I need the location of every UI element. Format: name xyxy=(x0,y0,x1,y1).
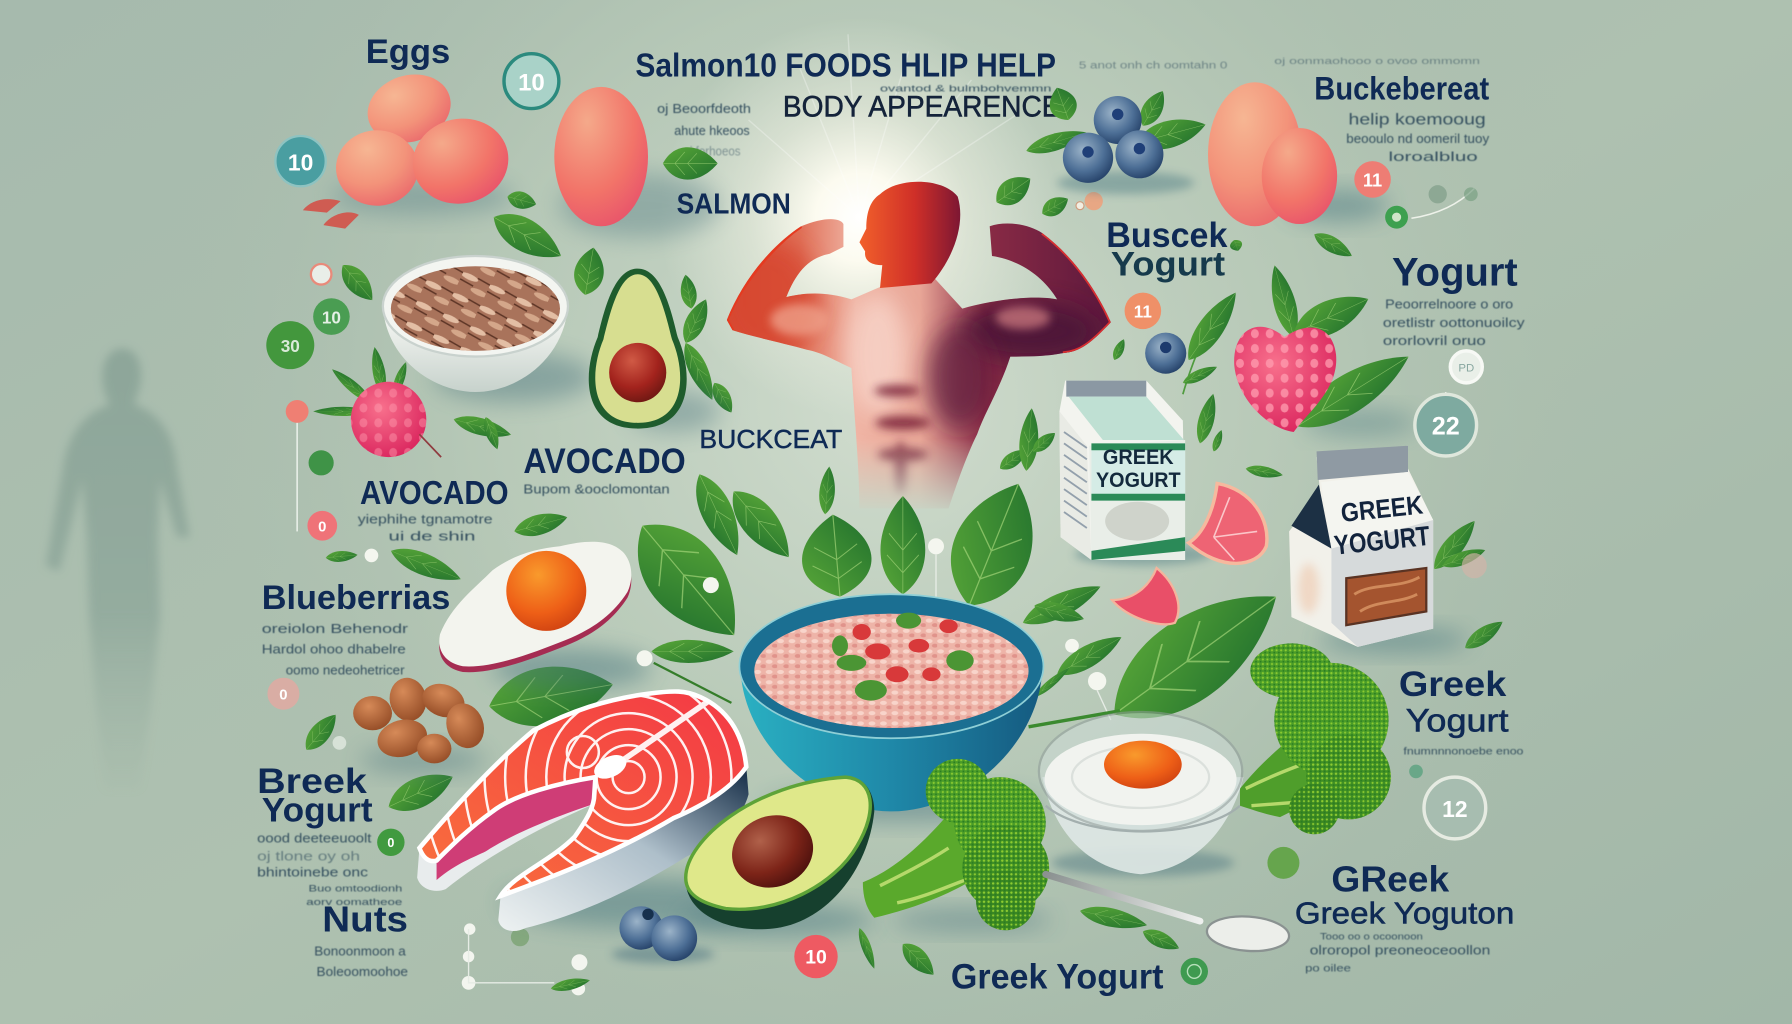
icon: left broccoli xyxy=(863,759,1051,931)
top right faint text: oj oonmaohooo o ovoo ommomn xyxy=(1274,56,1480,66)
small badges: left bottom: 0 xyxy=(279,687,288,703)
label: buscek yogurt: Yogurt xyxy=(1111,245,1225,283)
icon: bowl of buckwheat xyxy=(383,256,594,402)
leaves: upper left cluster xyxy=(335,147,738,416)
label: breek yogurt: Yogurt xyxy=(262,792,373,830)
label: yogurt right: Peoorrelnoore o oro xyxy=(1385,298,1513,312)
icon: yogurt carton large: YOGURT xyxy=(1333,520,1431,561)
small fruit and leaves near man xyxy=(989,169,1356,474)
label: breek yogurt: oood deeteeuoolt xyxy=(257,831,372,845)
text block: top left salmon note xyxy=(657,102,751,158)
label: avocado lower: yiephihe tgnamotre xyxy=(358,512,493,526)
title: Salmon10 FOODS HLIP HELP xyxy=(635,48,1056,85)
icon: right broccoli xyxy=(1240,643,1391,834)
badges: left column: 10 xyxy=(322,307,341,327)
badges: right column mid: 22 xyxy=(1432,412,1460,440)
badge: 12: 12 xyxy=(1442,796,1468,822)
icon: large egg xyxy=(554,87,720,238)
icon: spoon xyxy=(855,874,1290,982)
label: greek yogurt right: Greek xyxy=(1399,664,1507,704)
icon: trio of eggs xyxy=(303,64,516,229)
label: nuts: aorv oomatheoe xyxy=(306,897,402,907)
label: yogurt right xyxy=(1383,251,1525,348)
badge: 10 top xyxy=(504,54,559,109)
label: greek yogurt right: Yogurt xyxy=(1406,702,1509,738)
badges: right column top: 11 xyxy=(1363,169,1382,190)
icon: top blueberries xyxy=(1024,83,1209,194)
icon: heart raspberry xyxy=(1234,263,1419,443)
icon: salmon steak xyxy=(416,689,749,938)
small badges: left bottom: 0 xyxy=(387,836,394,850)
label: avocado lower xyxy=(358,475,509,544)
label: buscek yogurt: 11 xyxy=(1134,302,1152,322)
central glow and rays xyxy=(659,17,1059,417)
label: buckebereat: loroalbluo xyxy=(1389,150,1478,164)
label: nuts: Boleoomoohoe xyxy=(317,965,408,979)
label: buscek yogurt: Buscek xyxy=(1106,215,1228,255)
badges: bottom: 10 xyxy=(805,946,827,968)
spinach leaves behind bowl xyxy=(365,466,1127,720)
text block: top left salmon note: oj Beoorfdeoth xyxy=(657,102,751,116)
label: nuts: Buo omtoodionh xyxy=(309,883,402,893)
label: greek yogurt bottom: Greek Yogurt xyxy=(951,957,1164,997)
label: greek yoguton: po oilee xyxy=(1305,963,1351,974)
label: avocado upper: AVOCADO xyxy=(523,441,686,481)
leaves: mid left xyxy=(299,411,618,820)
badges: left column xyxy=(266,264,350,541)
label: buckceat: BUCKCEAT xyxy=(699,424,842,454)
label: yogurt right: Yogurt xyxy=(1392,251,1518,295)
badge: 10 top: 10 xyxy=(518,69,545,96)
label: breek yogurt: Breek xyxy=(257,761,367,801)
badges: bottom xyxy=(794,935,1208,985)
label: salmon: SALMON xyxy=(677,189,791,221)
badge: 10 left: 10 xyxy=(288,149,313,175)
small badges: left bottom xyxy=(267,678,405,856)
icon: left raspberry xyxy=(313,346,441,457)
badges: left column: 30 xyxy=(281,336,300,356)
icon: yogurt carton large: GREEK xyxy=(1339,490,1424,528)
label: breek yogurt: bhintoinebe onc xyxy=(257,866,368,880)
label: buckebereat: Buckebereat xyxy=(1314,70,1489,106)
label: blueberrias: oomo nedeohetricer xyxy=(286,663,405,677)
man flexing xyxy=(726,219,1111,508)
label: greek yoguton: olroropol preoneoceoollon xyxy=(1310,943,1490,957)
label: buckebereat: beooulo nd oomeril tuoy xyxy=(1346,132,1490,146)
label: greek yoguton: Greek Yoguton xyxy=(1295,895,1514,930)
icon: yogurt carton small xyxy=(1059,381,1211,566)
icon: avocado half xyxy=(589,269,720,432)
label: blueberrias xyxy=(262,579,450,677)
label: breek yogurt: oj tlone oy oh xyxy=(257,850,360,864)
icon: yogurt carton large xyxy=(1289,446,1487,653)
top right faint text: 5 anot onh ch oomtahn 0 xyxy=(1079,61,1228,72)
label: buscek yogurt xyxy=(1106,215,1228,329)
label: yogurt right: oretlistr oottonuoilcy xyxy=(1383,316,1525,330)
icon: grapefruit wedges xyxy=(1112,483,1507,654)
icon: yogurt carton small: GREEK xyxy=(1103,444,1174,469)
icon: fried egg xyxy=(439,542,651,689)
label: avocado lower: AVOCADO xyxy=(360,475,509,512)
label: yogurt right: ororlovril oruo xyxy=(1383,334,1486,348)
badges: right column top xyxy=(1354,161,1478,229)
badge: 12 xyxy=(1409,765,1486,839)
label: blueberrias: oreiolon Behenodr xyxy=(262,622,408,636)
badge: 10 left xyxy=(275,136,326,186)
title: ovantod & bulmbohvemmn xyxy=(880,83,1051,93)
label: avocado lower: ui de shin xyxy=(389,530,475,544)
label: avocado upper xyxy=(523,441,686,497)
icon: small blueberry and sprig xyxy=(1110,286,1284,480)
text block: top left salmon note: ahute hkeoos xyxy=(674,124,750,138)
label: greek yoguton: GReek xyxy=(1331,858,1450,899)
badges: right column mid xyxy=(1415,351,1482,457)
label: blueberrias: Hardol ohoo dhabelre xyxy=(262,643,406,657)
label: greek yoguton: Tooo oo o ocoonoon xyxy=(1320,931,1423,941)
label: greek yogurt right: fnumnnnonoebe enoo xyxy=(1403,746,1524,757)
icon: large spinach leaf xyxy=(1029,564,1300,747)
label: avocado upper: Bupom &ooclomontan xyxy=(523,483,670,497)
icon: nuts xyxy=(353,675,490,774)
label: greek yoguton xyxy=(1295,858,1514,974)
badges: left column: 0 xyxy=(318,519,326,535)
icon: blueberries bottom xyxy=(611,906,714,963)
label: eggs: Eggs xyxy=(366,33,450,71)
text block: top left salmon note: ni forhoeos xyxy=(683,144,741,158)
icon: central bowl with salad xyxy=(739,594,1043,822)
icon: right eggs xyxy=(1208,82,1389,226)
icon: lower avocado xyxy=(680,777,874,936)
label: buckebereat xyxy=(1314,70,1490,164)
left faded silhouette xyxy=(46,349,190,789)
icon: glass yogurt bowl xyxy=(1039,712,1243,877)
label: nuts xyxy=(306,883,408,979)
small green dot badge xyxy=(1267,847,1299,879)
label: breek yogurt xyxy=(257,761,373,880)
connector markers bottom left xyxy=(462,923,591,995)
icon: yogurt carton small: YOGURT xyxy=(1096,467,1181,492)
badges: right column mid: PD xyxy=(1458,362,1474,374)
label: greek yogurt right xyxy=(1399,664,1524,757)
title: BODY APPEARENCE xyxy=(783,91,1061,124)
top right faint text xyxy=(1079,56,1480,72)
man head xyxy=(859,182,960,288)
label: buckebereat: helip koemooug xyxy=(1349,112,1486,129)
title xyxy=(635,48,1061,124)
label: blueberrias: Blueberrias xyxy=(262,579,450,617)
label: nuts: Bonoonmoon a xyxy=(314,944,406,958)
label: nuts: Nuts xyxy=(322,898,408,939)
